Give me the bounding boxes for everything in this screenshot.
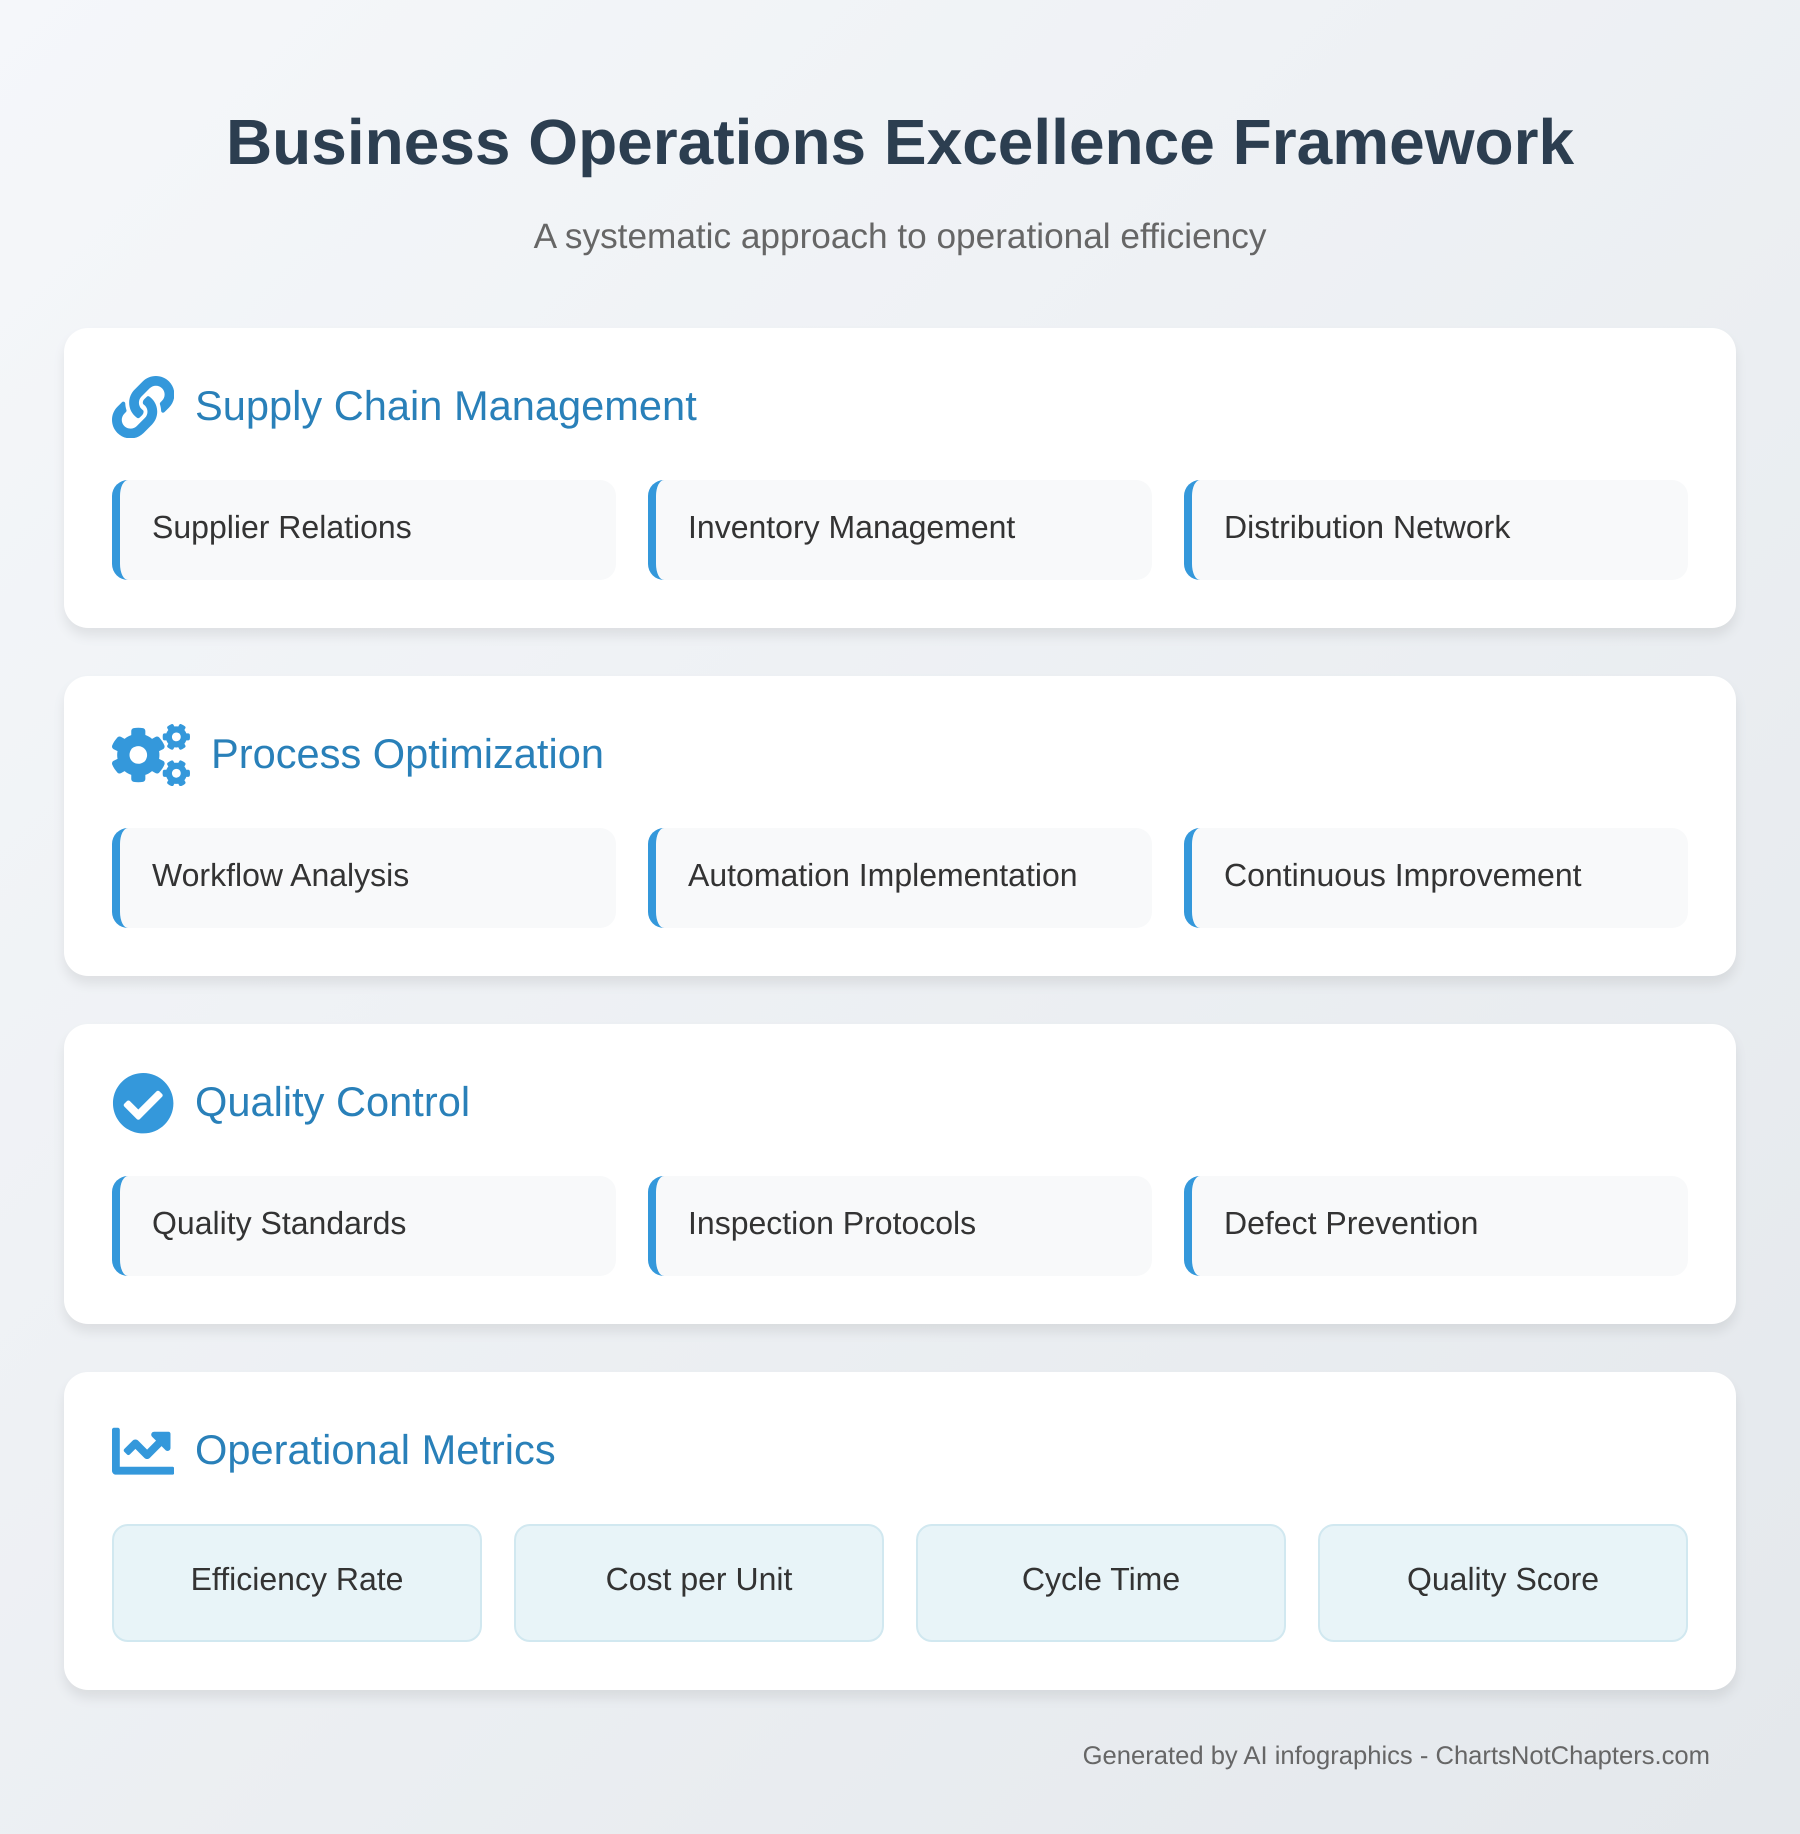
heading: quality control: Quality Control bbox=[195, 1078, 470, 1125]
metric: cycle time bbox=[916, 1524, 1286, 1642]
title: Business Operations Excellence Framework bbox=[226, 106, 1574, 178]
item: defect prevention bbox=[1184, 1176, 1688, 1276]
item: continuous improvement: Continuous Improvement bbox=[1224, 857, 1582, 893]
heading: process optimization: Process Optimization bbox=[211, 730, 604, 777]
item: workflow analysis bbox=[112, 828, 616, 928]
item: distribution network: Distribution Network bbox=[1224, 509, 1510, 545]
metric: quality score bbox=[1318, 1524, 1688, 1642]
item: supplier relations: Supplier Relations bbox=[152, 509, 412, 545]
item: defect prevention: Defect Prevention bbox=[1224, 1205, 1478, 1241]
item: continuous improvement bbox=[1184, 828, 1688, 928]
panel: quality control bbox=[64, 1024, 1736, 1324]
metric: efficiency rate: Efficiency Rate bbox=[191, 1561, 403, 1597]
item: automation implementation: Automation Implementation bbox=[688, 857, 1078, 893]
item: quality standards bbox=[112, 1176, 616, 1276]
panel: operational metrics bbox=[64, 1372, 1736, 1690]
item: inspection protocols bbox=[648, 1176, 1152, 1276]
icon: line chart bbox=[112, 1428, 174, 1475]
item: inspection protocols: Inspection Protocols bbox=[688, 1205, 976, 1241]
icon: check circle bbox=[112, 1073, 174, 1134]
metric: quality score: Quality Score bbox=[1407, 1561, 1599, 1597]
item: workflow analysis: Workflow Analysis bbox=[152, 857, 409, 893]
panel: supply chain management bbox=[64, 328, 1736, 628]
metric: cost per unit: Cost per Unit bbox=[606, 1561, 792, 1597]
item: supplier relations bbox=[112, 480, 616, 580]
item: automation implementation bbox=[648, 828, 1152, 928]
item: distribution network bbox=[1184, 480, 1688, 580]
heading: supply chain management: Supply Chain Management bbox=[195, 382, 697, 429]
icon: gears bbox=[112, 724, 190, 786]
item: inventory management: Inventory Management bbox=[688, 509, 1015, 545]
metric: cycle time: Cycle Time bbox=[1022, 1561, 1180, 1597]
icon: chain link bbox=[112, 376, 174, 438]
panel: process optimization bbox=[64, 676, 1736, 976]
item: inventory management bbox=[648, 480, 1152, 580]
metric: efficiency rate bbox=[112, 1524, 482, 1642]
item: quality standards: Quality Standards bbox=[152, 1205, 406, 1241]
footer credit: Generated by AI infographics - ChartsNotChapters.com bbox=[1083, 1742, 1710, 1770]
metric: cost per unit bbox=[514, 1524, 884, 1642]
subtitle: A systematic approach to operational efficiency bbox=[534, 217, 1266, 256]
heading: operational metrics: Operational Metrics bbox=[195, 1426, 556, 1473]
